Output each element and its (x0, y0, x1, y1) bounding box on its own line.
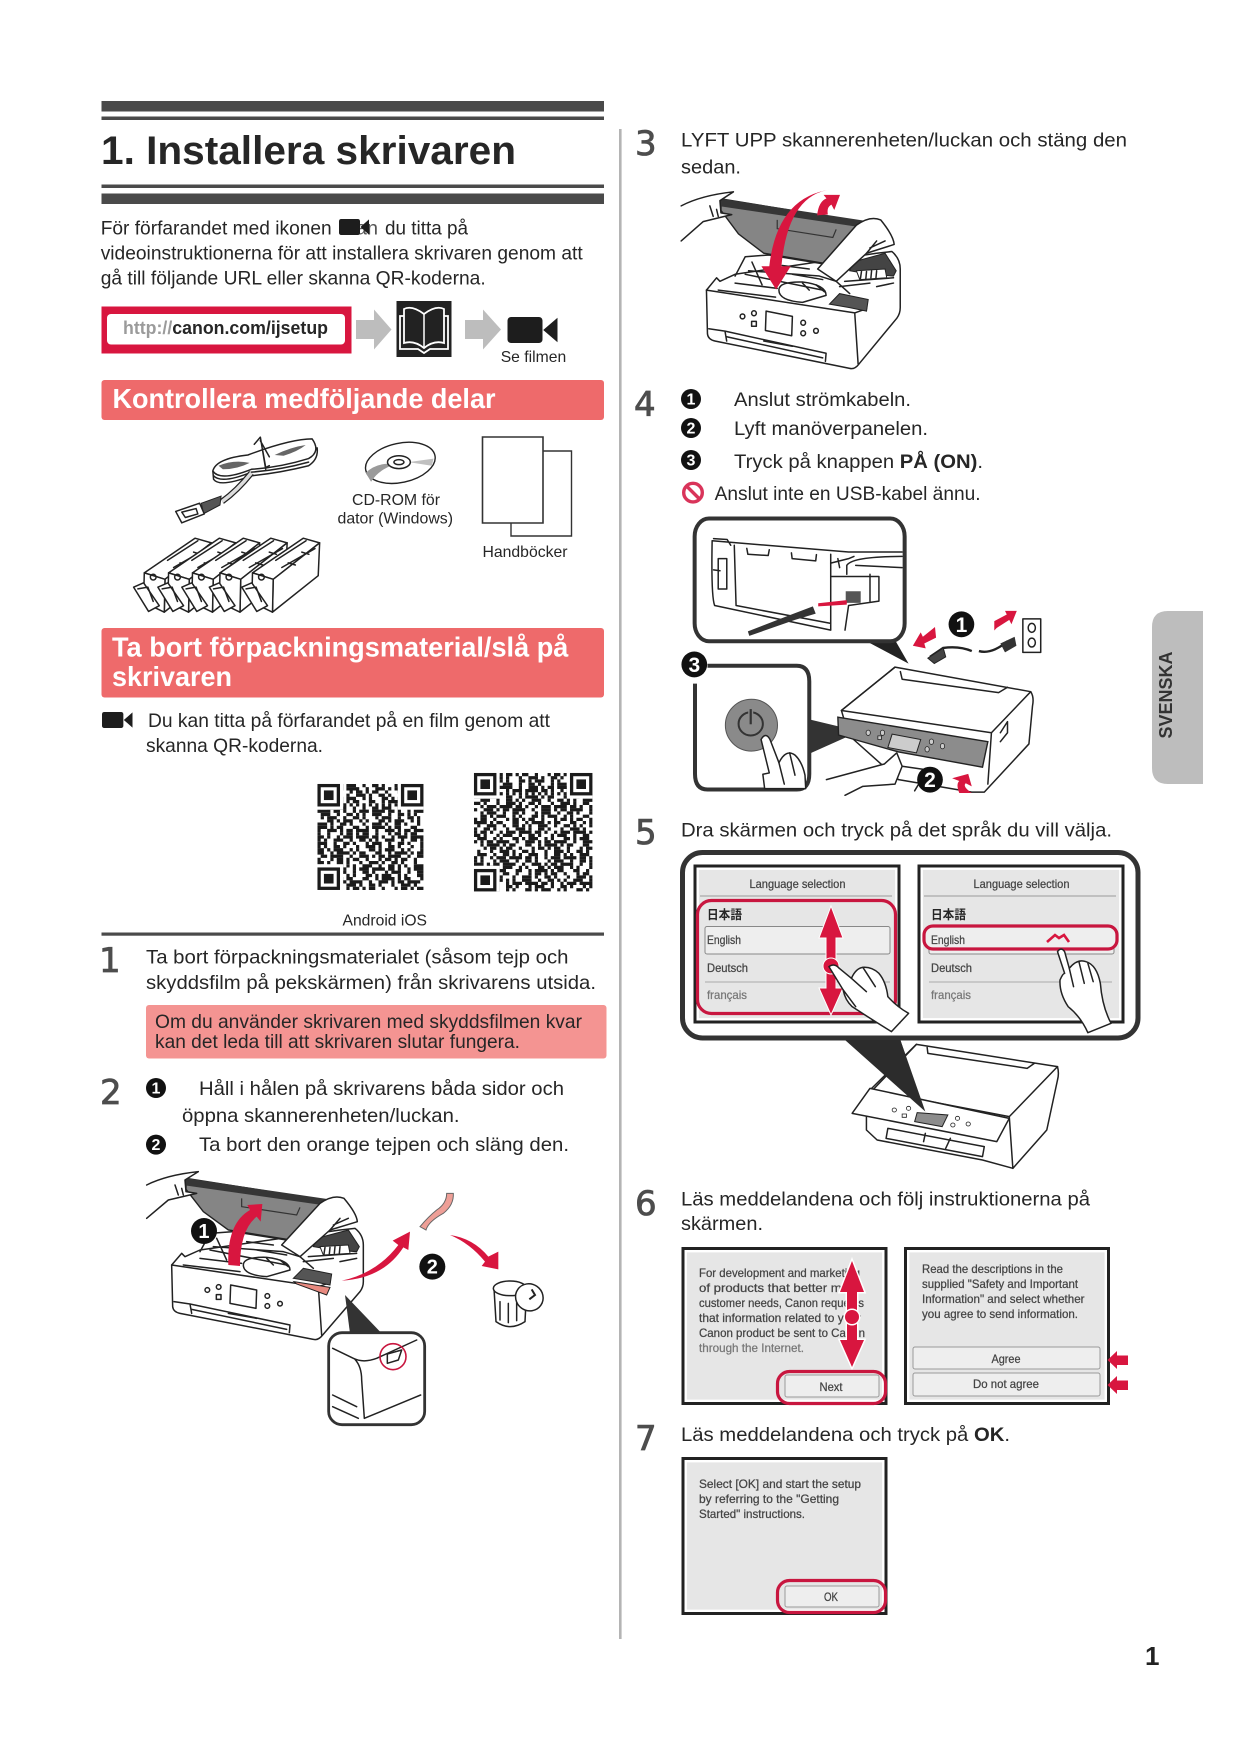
detail callout: side hole (329, 1333, 425, 1425)
arrow: to bin (450, 1235, 498, 1269)
screen: agree: Do not agree (973, 1377, 1039, 1391)
badge 2 (917, 767, 943, 793)
badge 1 (191, 1218, 217, 1244)
icon: CD-ROM (362, 436, 439, 489)
step 3: LYFT UPP skannerenheten/luckan och stäng den (681, 130, 1127, 152)
URL box (102, 306, 352, 354)
button: OK: OK (824, 1590, 838, 1604)
screen: data consent: customer needs, Canon requests (699, 1296, 864, 1310)
screen: data consent: Canon product be sent to Canon (699, 1326, 865, 1340)
screen: data consent: For development and marketing (699, 1266, 860, 1280)
badge 1: 1 (956, 614, 968, 637)
arrow (356, 310, 392, 350)
step number: 4 (634, 385, 656, 425)
step 4: Anslut strömkabeln. (734, 389, 911, 411)
step number: 2 (100, 1073, 122, 1113)
screen: data consent (683, 1248, 886, 1404)
section heading: parts: Kontrollera medföljande delar (112, 383, 496, 414)
button: OK (778, 1580, 886, 1612)
language tab (1152, 611, 1203, 784)
badge 1: 1 (198, 1221, 210, 1243)
URL flow: link, book, movie (102, 301, 566, 366)
icon: power cord (176, 437, 317, 523)
step 7 (635, 1419, 1010, 1614)
arrows: buttons (1108, 1351, 1128, 1394)
section heading: remove packing (102, 628, 604, 698)
column divider (619, 129, 622, 1639)
icon: trash bin (493, 1278, 548, 1327)
badge 2 (681, 418, 701, 438)
step 4: Lyft manöverpanelen. (734, 418, 928, 440)
warning callout: kan det leda till att skrivaren slutar fungera. (155, 1031, 520, 1053)
illustration: open printer, remove tape (147, 1172, 548, 1425)
header rules and title (101, 101, 604, 204)
step 1: skyddsfilm på pekskärmen) från skrivarens utsida. (146, 972, 596, 994)
badge 2: 2 (427, 1257, 438, 1279)
intro text: du titta på (385, 218, 468, 240)
screen: drag: Deutsch (707, 961, 748, 975)
badge 2: 2 (687, 421, 696, 438)
screen: agree: Information" and select whether (922, 1292, 1084, 1306)
screen: tap: English (931, 933, 965, 947)
step number: 5 (635, 813, 657, 853)
step 1: Ta bort förpackningsmaterialet (såsom tejp och (146, 947, 568, 969)
movie note: Du kan titta på förfarandet på en film genom att (148, 710, 551, 732)
illustration: close cover (681, 192, 900, 369)
badge 3: 3 (688, 654, 700, 677)
screen: agree: supplied "Safety and Important (922, 1277, 1079, 1291)
icon: inline camera (339, 219, 369, 235)
included parts (134, 436, 572, 612)
intro text (101, 218, 583, 290)
screen: OK: Started" instructions. (699, 1507, 805, 1521)
badge 3 (681, 450, 701, 470)
caption: manuals: Handböcker (482, 544, 568, 561)
arrows and cord (913, 611, 1041, 664)
badge 1: 1 (152, 1081, 161, 1098)
movie note (102, 710, 551, 757)
screen: tap: Language selection (974, 877, 1070, 891)
section heading: parts (102, 380, 604, 420)
step 5: Dra skärmen och tryck på det språk du vill välja. (681, 820, 1112, 842)
screen: agree: Read the descriptions in the (922, 1262, 1063, 1276)
screen: OK: by referring to the "Getting (699, 1492, 839, 1506)
button: Next (778, 1372, 886, 1404)
intro text: För förfarandet med ikonen (101, 218, 332, 240)
intro text: videoinstruktionerna för att installera skrivaren genom att (101, 243, 583, 265)
badge 2 (146, 1135, 166, 1155)
QR code: iOS (474, 773, 592, 891)
step 4: Anslut inte en USB-kabel ännu. (715, 483, 981, 505)
callout wedge (845, 1036, 925, 1112)
screen: agree: you agree to send information. (922, 1307, 1078, 1321)
icon: camera (102, 712, 132, 728)
callout wedge (345, 1295, 382, 1333)
arrow: lift panel (952, 774, 972, 793)
screen: OK: Select [OK] and start the setup (699, 1477, 861, 1491)
step 2: Ta bort den orange tejpen och släng den. (199, 1134, 569, 1156)
badge 1 (146, 1078, 166, 1098)
icon: prohibited (684, 483, 702, 502)
screen: data consent: through the Internet. (699, 1341, 804, 1355)
screen: agree (906, 1248, 1108, 1404)
badge 2: 2 (152, 1137, 161, 1154)
open printer (147, 1172, 363, 1340)
step 6: Läs meddelandena och följ instruktionerna på (681, 1189, 1090, 1211)
hand: tap (1057, 949, 1111, 1033)
step number: 1 (99, 941, 121, 981)
callout: rear of printer (695, 518, 909, 664)
button: Next: Next (820, 1380, 843, 1394)
icon: manuals (482, 437, 572, 536)
step 3: sedan. (681, 156, 741, 178)
movie note: skanna QR-koderna. (146, 735, 323, 757)
step 2 (100, 1073, 569, 1156)
screen: drag: français (707, 988, 747, 1002)
icon: movie camera (508, 317, 558, 343)
caption: Se filmen (501, 349, 566, 366)
section heading: remove packing: Ta bort förpackningsmaterial/slå på (112, 631, 569, 662)
QR code: Android (318, 784, 423, 890)
illustration: printer with raised panel (845, 1040, 1058, 1168)
badge 1: 1 (687, 392, 696, 409)
hand: swipe (829, 965, 909, 1032)
step number: 3 (635, 124, 657, 164)
screen: tap: Deutsch (931, 961, 972, 975)
screen: data consent: that information related to your (699, 1311, 861, 1325)
orange tape on printer (294, 1282, 330, 1295)
callout: two screens (682, 852, 1138, 1038)
screen: OK (683, 1458, 886, 1614)
arrow: drag up and down (819, 906, 843, 1015)
callout: power button (695, 666, 859, 789)
badge 3 (681, 652, 707, 677)
QR caption: Android iOS (342, 912, 427, 929)
step 7: Läs meddelandena och tryck på OK. (681, 1424, 1010, 1446)
screen: tap (919, 866, 1123, 1022)
step 5 (635, 813, 1138, 1168)
icon: book (396, 301, 452, 357)
section heading: remove packing: skrivaren (112, 661, 232, 692)
step 4 (634, 385, 1041, 795)
warning callout (146, 1005, 606, 1058)
arrow: scroll (840, 1261, 864, 1367)
step number: 7 (635, 1419, 657, 1459)
step 2: öppna skannerenheten/luckan. (182, 1105, 460, 1127)
arrow: tape out (342, 1232, 410, 1281)
screen: data consent: of products that better meet (699, 1281, 861, 1295)
warning callout: Om du använder skrivaren med skyddsfilmen kvar (155, 1011, 582, 1033)
arrow: lift cover (228, 1204, 262, 1266)
intro text: gå till följande URL eller skanna QR-koderna. (101, 268, 486, 290)
language tab: SVENSKA (1156, 652, 1176, 738)
printer with lifted panel (826, 667, 1033, 795)
badge 3: 3 (687, 453, 696, 470)
illustration: connect power and press ON (681, 518, 1041, 795)
badge 1 (681, 389, 701, 409)
tape (420, 1193, 453, 1230)
icon: ink cartridges (134, 538, 320, 612)
step 6 (635, 1184, 1128, 1404)
badge 2 (419, 1254, 445, 1280)
badge 2: 2 (924, 769, 936, 792)
badge 1 (949, 611, 974, 637)
step 2: Håll i hålen på skrivarens båda sidor och (199, 1078, 564, 1100)
step 1 (99, 932, 606, 1058)
included parts: dator (Windows) (338, 511, 453, 528)
arrows: up and down (761, 189, 840, 289)
screen: tap: 日本語 (931, 907, 966, 922)
intro text: kan (346, 218, 378, 240)
step 6: skärmen. (681, 1213, 763, 1235)
screen: tap: français (931, 988, 971, 1002)
page number: 1 (1145, 1641, 1159, 1671)
screen: drag (695, 866, 899, 1022)
screen: drag: 日本語 (707, 907, 742, 922)
URL box: http://canon.com/ijsetup (123, 318, 328, 338)
screen: drag: English (707, 933, 741, 947)
step 4: Tryck på knappen PÅ (ON). (734, 449, 983, 473)
title: 1. Installera skrivaren (101, 129, 516, 173)
step 3 (635, 124, 1127, 369)
screen: agree: Agree (992, 1352, 1021, 1366)
screen: drag: Language selection (750, 877, 846, 891)
step number: 6 (635, 1184, 657, 1224)
caption: CD-ROM: CD-ROM för (352, 492, 441, 509)
arrow (465, 310, 501, 350)
